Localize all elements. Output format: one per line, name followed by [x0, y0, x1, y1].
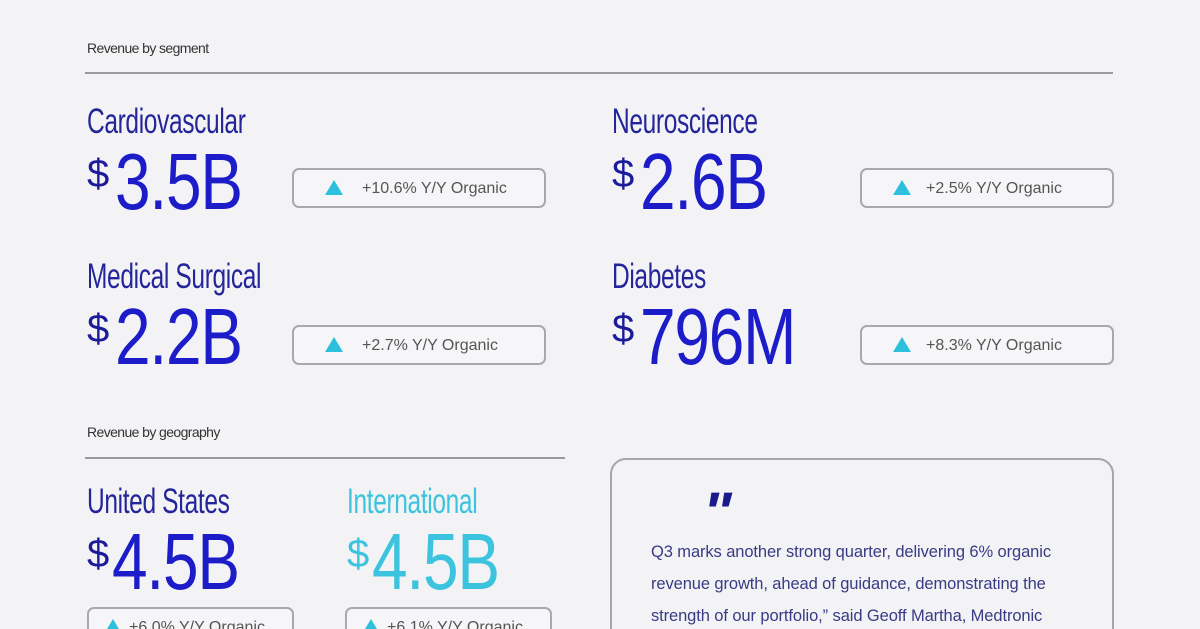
block: neuroscience: $: [612, 152, 634, 196]
pill: diabetes growth: +8.3% Y/Y Organic: [926, 337, 1062, 354]
block: medical surgical: Medical Surgical: [87, 257, 261, 296]
pill: cardiovascular growth: [292, 168, 546, 208]
section label: revenue by geography: Revenue by geography: [87, 424, 220, 440]
pill: us growth: [87, 607, 294, 629]
block: medical surgical: 2.2B: [115, 292, 242, 381]
block: united states: $: [87, 532, 109, 576]
pill: neuroscience growth: [860, 168, 1114, 208]
block: diabetes: [612, 257, 1114, 381]
pill: medical surgical growth: +2.7% Y/Y Organic: [362, 337, 498, 354]
pill: cardiovascular growth: +10.6% Y/Y Organic: [362, 180, 507, 197]
pill: medical surgical growth: [292, 325, 546, 365]
block: medical surgical: [87, 257, 546, 381]
block: cardiovascular: Cardiovascular: [87, 102, 246, 141]
block: international: 4.5B: [372, 517, 499, 606]
block: cardiovascular: 3.5B: [115, 137, 242, 226]
block: cardiovascular: [87, 102, 546, 226]
pill: diabetes growth: [860, 325, 1114, 365]
quote text: Q3 marks another strong quarter, delivering 6% organic revenue growth, ahead of guidance, demonstrating the strength of our portfolio,” said Geoff Martha, Medtronic: [651, 543, 1051, 625]
block: diabetes: $: [612, 307, 634, 351]
block: united states: [87, 482, 294, 629]
pill: neuroscience growth: +2.5% Y/Y Organic: [926, 180, 1062, 197]
block: international: $: [347, 532, 369, 576]
block: medical surgical: $: [87, 307, 109, 351]
section label: revenue by segment: Revenue by segment: [87, 40, 209, 56]
block: cardiovascular: $: [87, 152, 109, 196]
icon: quote mark: ": [703, 480, 732, 543]
block: international: International: [347, 482, 477, 521]
quote panel: [610, 458, 1114, 629]
block: neuroscience: [612, 102, 1114, 226]
pill: international growth: [345, 607, 552, 629]
block: diabetes: Diabetes: [612, 257, 706, 296]
block: diabetes: 796M: [640, 292, 795, 381]
block: united states: 4.5B: [112, 517, 239, 606]
block: international: [345, 482, 552, 629]
block: united states: United States: [87, 482, 230, 521]
block: neuroscience: Neuroscience: [612, 102, 758, 141]
block: neuroscience: 2.6B: [640, 137, 767, 226]
